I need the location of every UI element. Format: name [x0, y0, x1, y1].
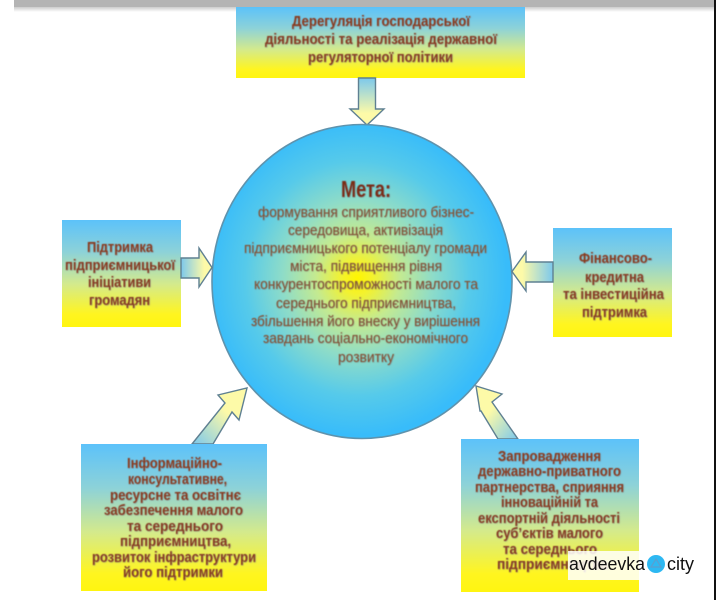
text: finance: та інвестиційна	[563, 286, 665, 303]
text: information support	[92, 455, 256, 581]
panel: citizen initiative	[62, 220, 181, 327]
text: goal description: середнього підприємництва,	[276, 295, 456, 312]
text: public-private partnership: та середнього	[503, 541, 597, 558]
text: public-private partnership: інноваційній та	[501, 494, 599, 511]
text: information support: підприємництва,	[120, 533, 231, 550]
text: information support: та середнього	[127, 518, 223, 535]
circle: goal	[212, 124, 512, 438]
text: goal description: розвитку	[338, 349, 394, 366]
text: public-private partnership: партнерства, сприяння	[475, 479, 624, 496]
watermark: avdeevka city: city	[667, 554, 694, 574]
text: finance	[563, 250, 665, 321]
text: goal description: завдань соціально-економічного	[263, 330, 468, 347]
text: deregulation: Дерегуляція господарської	[292, 13, 471, 30]
text: public-private partnership: експортній діяльності	[478, 510, 620, 527]
text: public-private partnership: Запровадження	[498, 448, 601, 465]
text: information support: консультативне,	[128, 471, 227, 488]
text: deregulation: регуляторної політики	[308, 49, 453, 66]
text: information support: Інформаційно-	[127, 455, 222, 472]
text: public-private partnership: державно-приватного	[478, 463, 621, 480]
text: deregulation: діяльності та реалізація державної	[265, 31, 498, 48]
text: citizen initiative: громадян	[89, 292, 150, 309]
panel: public-private partnership	[461, 439, 639, 592]
text: public-private partnership: підприємництва	[497, 556, 609, 573]
text: finance: Фінансово-	[579, 250, 652, 267]
arrow: bottom right	[476, 386, 518, 439]
panel: finance	[553, 228, 672, 337]
arrow: top	[350, 78, 384, 125]
text: information support: його підтримки	[123, 564, 223, 581]
text: goal description: формування сприятливого бізнес-	[258, 204, 474, 221]
text: goal description	[244, 204, 487, 366]
arrow: bottom left	[192, 388, 247, 444]
text: public-private partnership	[475, 448, 624, 573]
watermark: avdeevka city	[568, 551, 694, 580]
panel: deregulation	[236, 7, 525, 78]
text: deregulation	[265, 13, 498, 66]
text: information support: ресурсне та освітнє	[110, 487, 241, 504]
text: citizen initiative: Підтримка	[87, 239, 154, 256]
text: citizen initiative: ініціативи	[88, 274, 151, 291]
top grey bar	[14, 0, 716, 12]
text: goal description: збільшення його внеску у вирішення	[251, 313, 480, 330]
text: citizen initiative: підприємницької	[65, 257, 176, 274]
text: information support: забезпечення малого	[104, 502, 243, 519]
arrow: right	[512, 252, 553, 291]
watermark: avdeevka city: avdeevka	[569, 554, 646, 574]
arrow: left	[181, 248, 212, 287]
text: finance: підтримка	[582, 304, 648, 321]
heading: goal: Мета:	[341, 176, 391, 202]
text: goal description: міста, підвищення рівня	[290, 258, 442, 275]
panel: information support	[81, 444, 267, 591]
text: goal description: підприємницького потенціалу громади	[244, 240, 487, 257]
text: finance: кредитна	[585, 269, 645, 286]
text: public-private partnership: суб’єктів малого	[496, 525, 603, 542]
text: information support: розвиток інфраструктури	[92, 549, 256, 566]
text: goal description: середовища, активізація	[288, 222, 443, 239]
text: citizen initiative	[65, 239, 176, 309]
text: goal description: конкурентоспроможності малого та	[254, 276, 479, 293]
